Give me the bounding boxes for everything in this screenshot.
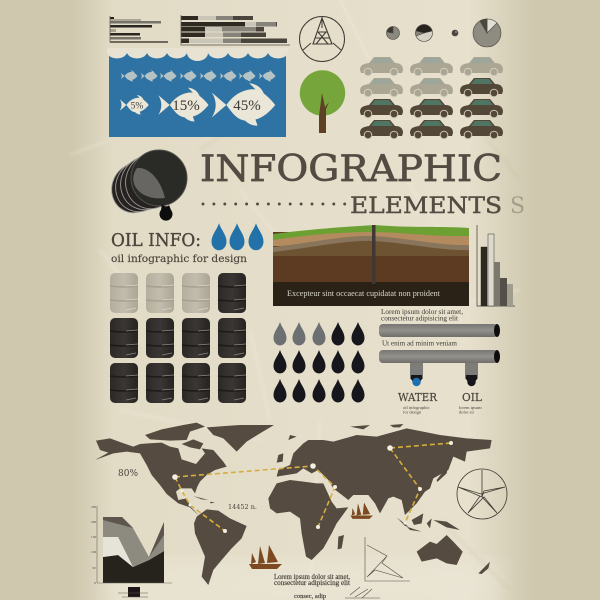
small fish row	[121, 70, 276, 82]
area chart: 200	[91, 520, 96, 524]
Americas and Greenland	[95, 423, 274, 585]
line chart	[345, 537, 410, 598]
fish 5%	[120, 95, 149, 114]
caption: oil	[459, 405, 482, 414]
map route lines	[175, 443, 451, 531]
stacked bar chart: top	[181, 15, 290, 45]
radar chart	[457, 469, 507, 519]
map route points	[172, 441, 453, 533]
Africa, Eurasia, Australia	[268, 424, 492, 574]
bottom text	[274, 574, 350, 600]
icon: tree	[300, 70, 345, 133]
bottom text: consec, adip	[294, 593, 326, 600]
heading: oil info: OIL INFO:	[111, 231, 201, 251]
fish 15%: 15%	[172, 98, 200, 114]
fish 45%: 45%	[233, 98, 261, 114]
pipe label line 2: consectetur adipisicing elit	[381, 314, 459, 322]
icon: tipped oil barrel	[104, 145, 187, 221]
bottom text: consectetur adipisicing elit	[274, 580, 350, 587]
small bottom chart	[118, 587, 148, 597]
icons: blue drops	[212, 223, 263, 250]
label: 80%: 80%	[118, 469, 138, 479]
caption: water: for design	[403, 410, 422, 414]
label: 14452 n.: 14452 n.	[228, 503, 257, 511]
soil caption: Excepteur sint occaecat cupidatat non proident	[287, 288, 441, 298]
dotted rule	[203, 203, 346, 205]
caption: oil: lorem ipsum	[459, 405, 482, 410]
caption: water: oil infographic	[403, 405, 430, 410]
oil nozzle	[466, 375, 477, 386]
label: water: WATER	[398, 391, 438, 404]
fish 5%: 5%	[131, 102, 143, 112]
subheading: oil infographic for design	[111, 253, 247, 265]
fish 15%	[158, 88, 209, 122]
area chart	[91, 505, 172, 585]
area chart: 150	[91, 535, 96, 539]
soil cross-section	[273, 225, 469, 306]
faded letter: S	[510, 194, 525, 219]
world map	[95, 423, 492, 585]
oil drop grid	[274, 322, 364, 402]
fish 45%	[212, 83, 275, 126]
water panel with fish	[107, 48, 288, 137]
pipe label 2: Ut enim ad minim veniam	[382, 338, 457, 348]
title: INFOGRAPHIC	[200, 149, 502, 190]
bottom text: Lorem ipsum dolor sit amet,	[274, 574, 350, 581]
ship icons	[249, 503, 373, 569]
pipe label: Lorem ipsum dolor sit amet,	[381, 307, 463, 316]
area chart: 50	[92, 566, 96, 570]
label: oil: OIL	[462, 391, 483, 404]
pie charts	[386, 19, 501, 47]
bar chart: top left	[110, 16, 168, 43]
water nozzle	[411, 375, 422, 386]
barrel grid	[110, 273, 246, 403]
bar chart: right	[477, 225, 515, 306]
caption: water	[403, 405, 430, 414]
caption: oil: dolor sit	[459, 410, 475, 414]
pipe diagram	[379, 324, 500, 386]
area chart: 100	[91, 550, 96, 554]
area chart: 0	[94, 581, 96, 585]
subtitle: ELEMENTS	[350, 194, 502, 219]
area chart: 250	[91, 505, 96, 509]
icon: oil derrick in circle	[300, 16, 344, 62]
car icons grid	[360, 57, 503, 139]
